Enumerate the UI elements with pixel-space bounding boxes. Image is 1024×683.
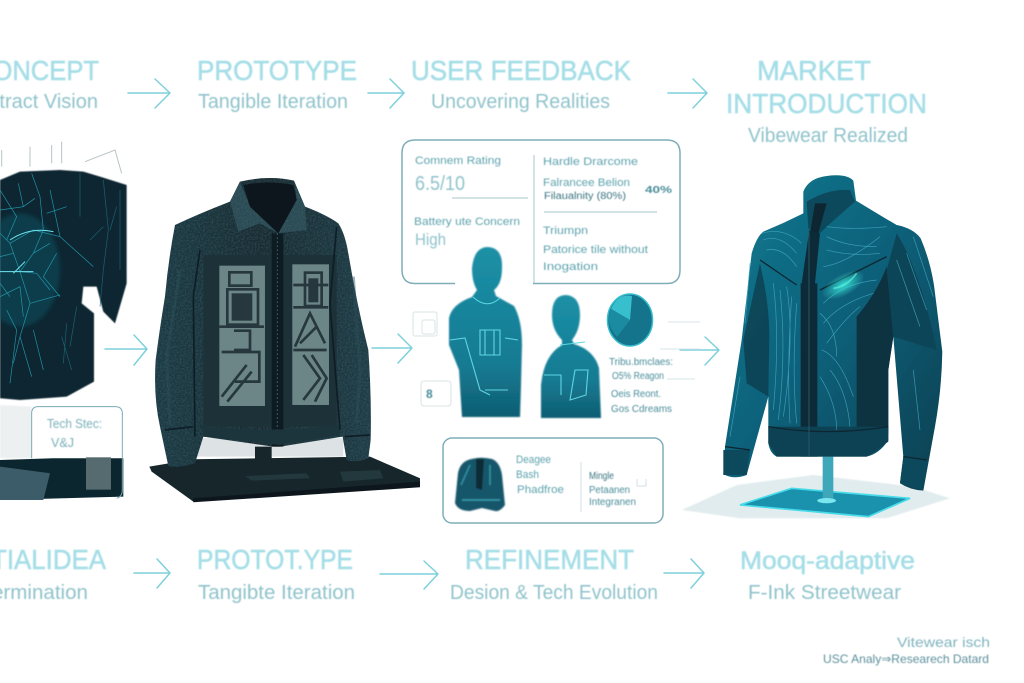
heading row: top stage titles: USER FEEDBACK	[411, 55, 631, 86]
e-ink panels	[219, 266, 265, 406]
jacket: abstract concept with neon lines	[0, 142, 127, 500]
panel: design refinement card: Mingle	[589, 471, 614, 482]
heading row: bottom stage labels: Desion & Tech Evolution	[450, 582, 658, 604]
panel: design refinement card: Phadfroe	[517, 484, 564, 496]
text block: survey breakdown: Tribu.bmclaes:	[609, 357, 673, 368]
callout: tech spec: Tech Stec:	[47, 417, 102, 431]
heading row: top stage titles: PROTOTYPE	[197, 55, 357, 86]
heading row: bottom stage labels: Mooq-adaptive	[740, 547, 915, 575]
heading row: bottom stage labels: F-Ink Streetwear	[748, 582, 901, 604]
footer: source credit: USC Analy⇒Researech Datard	[823, 652, 989, 666]
footer: source credit: Vitewear isch	[897, 634, 990, 650]
panel: user feedback card: Inogation	[543, 261, 598, 273]
base platform	[149, 457, 420, 502]
small icons beside figures	[413, 312, 700, 406]
heading row: bottom stage labels: PROTOT.YPE	[197, 544, 353, 575]
heading row: top stage titles: Uncovering Realities	[431, 91, 610, 113]
jacket: prototype with e-ink panels on base	[149, 178, 420, 502]
heading row: top stage titles: Tangible Iteration	[198, 91, 348, 113]
text block: survey breakdown: O5% Reagon	[612, 371, 664, 382]
panel: user feedback card: 40%	[645, 185, 672, 196]
figure: user from behind	[541, 295, 601, 418]
panel: user feedback card	[402, 140, 680, 284]
panel: user feedback card: High	[415, 230, 446, 249]
panel: user feedback card: Falrancee Belion	[543, 177, 630, 189]
text: stat label by icon: 8	[426, 387, 433, 401]
callout: tech spec	[47, 417, 102, 450]
text block: survey breakdown	[609, 357, 673, 415]
heading row: top stage titles: MARKET	[757, 55, 871, 86]
heading row: top stage titles: Vibewear Realized	[748, 125, 908, 147]
panel: user feedback card: 6.5/10	[415, 173, 465, 195]
arrows: all nine flow arrows	[105, 79, 719, 589]
panel: design refinement card	[443, 438, 663, 523]
footer: source credit	[823, 634, 990, 666]
jacket: mood-adaptive on glowing stand	[682, 175, 950, 518]
panel: user feedback card: Comnem Rating	[415, 155, 501, 167]
panel: design refinement card: Bash	[516, 469, 539, 481]
heading row: top stage titles	[0, 55, 927, 147]
figure: user front-facing	[449, 247, 522, 417]
panel: user feedback card: Filaualnity (80%)	[544, 191, 626, 202]
heading row: bottom stage labels: REFINEMENT	[465, 544, 634, 575]
heading row: bottom stage labels: Tangibte Iteration	[198, 582, 355, 604]
panel: user feedback card: Triumpn	[543, 225, 588, 237]
jacket body	[723, 175, 942, 491]
panel: user feedback card: Battery ute Concern	[414, 216, 520, 228]
text block: survey breakdown: Gos Cdreams	[611, 404, 672, 415]
callout: tech spec: V&J	[51, 436, 74, 450]
icon: mini jacket	[455, 458, 505, 511]
panel: design refinement card: Integranen	[589, 497, 636, 508]
panel: user feedback card: Patorice tile without	[543, 244, 648, 256]
panel: design refinement card: Deagee	[516, 454, 551, 466]
jacket body	[155, 178, 371, 467]
panel: user feedback card: Hardle Drarcome	[543, 156, 638, 168]
glowing base	[682, 457, 950, 518]
heading row: bottom stage labels	[0, 544, 915, 604]
chart: pie	[608, 294, 652, 346]
text block: survey breakdown: Oeis Reont.	[611, 389, 661, 400]
panel: design refinement card: Petaanen	[589, 485, 630, 496]
heading row: top stage titles: INTRODUCTION	[726, 88, 927, 119]
